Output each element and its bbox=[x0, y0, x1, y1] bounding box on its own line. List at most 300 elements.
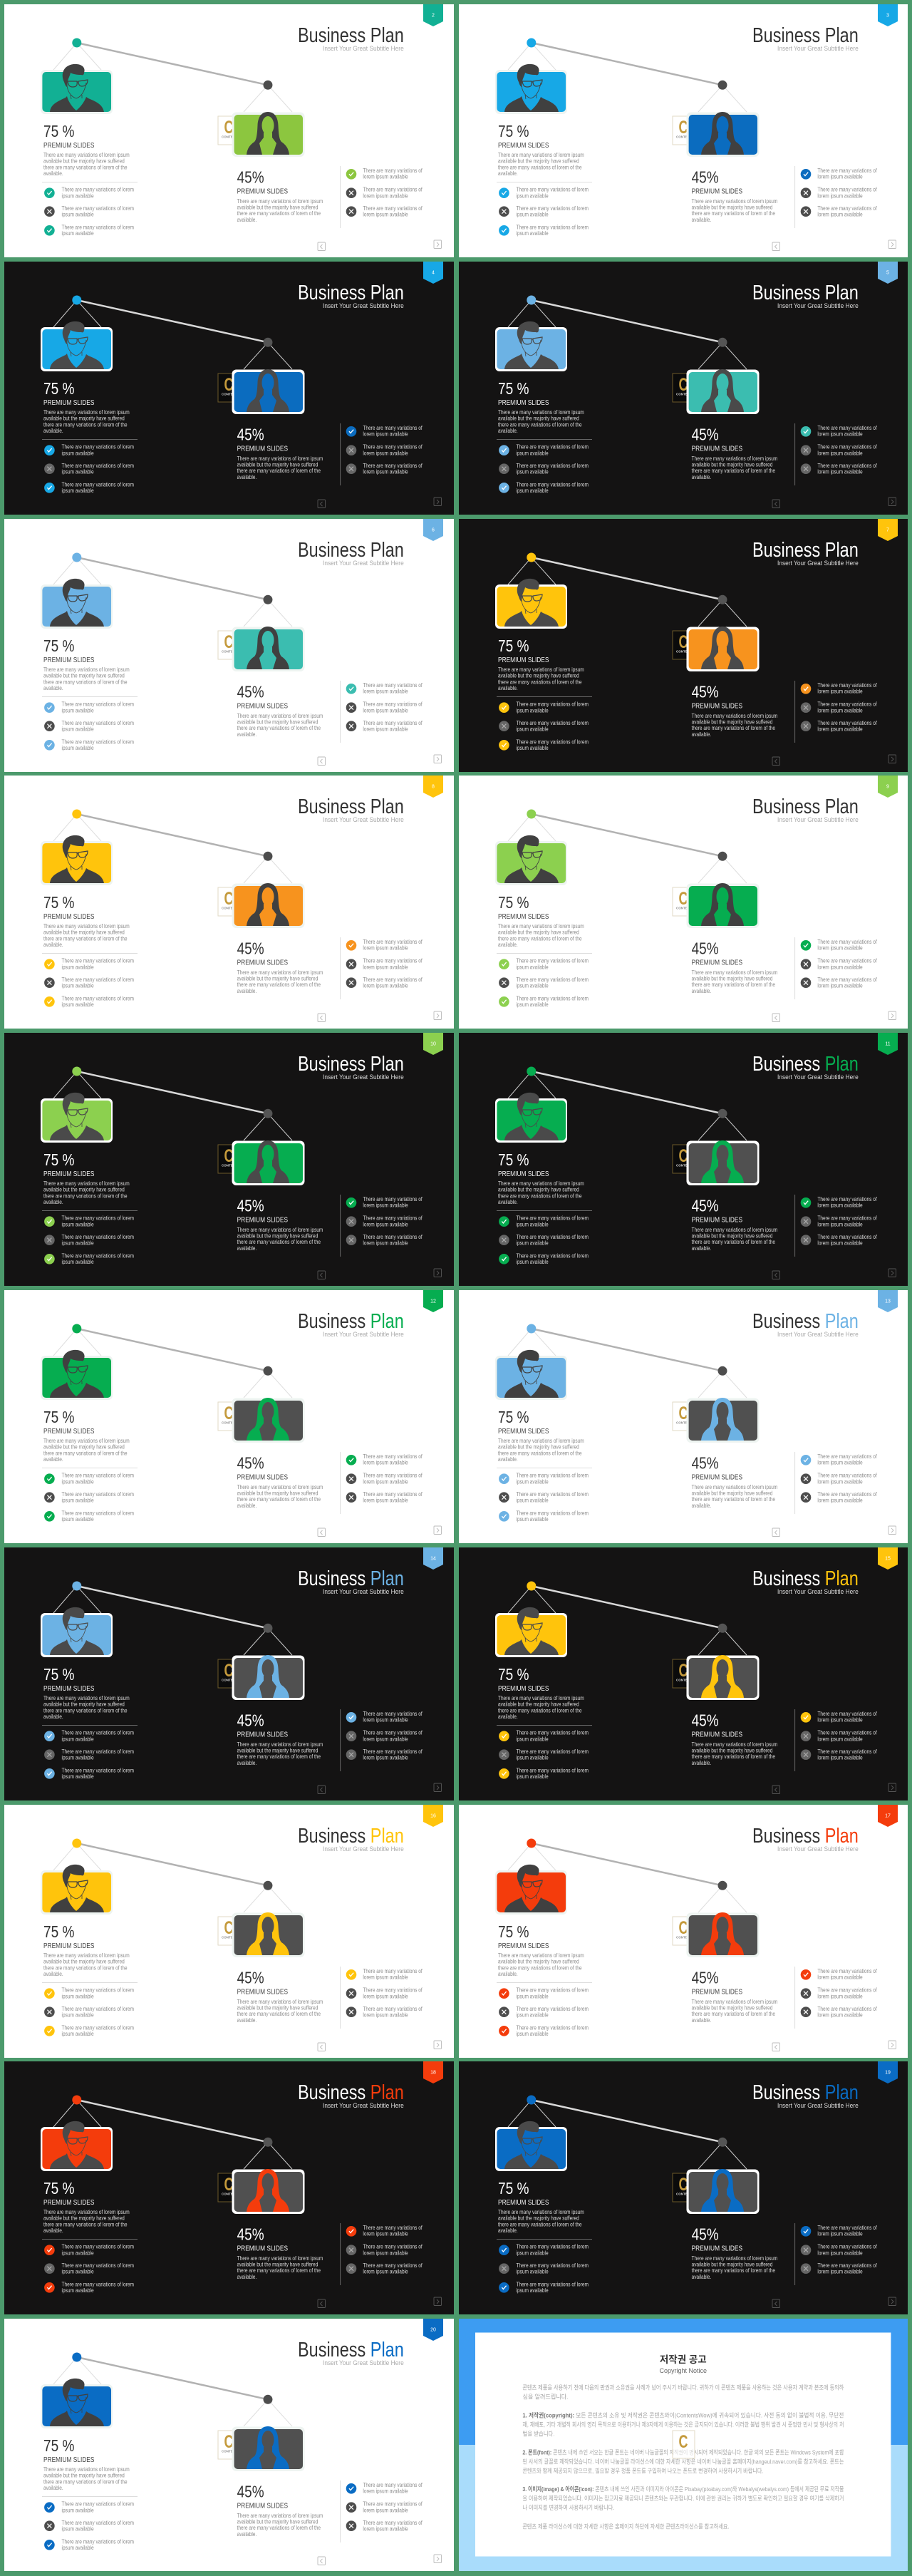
right checklist: lorem ipsum available bbox=[363, 688, 408, 694]
nav buttons bbox=[318, 755, 442, 765]
stat: 75 percent: there are many variations of lorem of the bbox=[498, 1192, 581, 1200]
left checklist: There are many variations of lorem bbox=[516, 1252, 589, 1259]
stat: 75 percent: 75 % bbox=[498, 637, 529, 655]
stat: 45 percent: PREMIUM SLIDES bbox=[691, 1473, 742, 1481]
right checklist bbox=[341, 1709, 423, 1771]
stat: 75 percent: there are many variations of lorem of the bbox=[43, 421, 127, 428]
left checklist: ipsum available bbox=[516, 1773, 548, 1780]
right checklist bbox=[794, 1709, 877, 1771]
right checklist bbox=[341, 423, 423, 485]
stat: 45 percent bbox=[237, 684, 323, 738]
right checklist: There are many variations of bbox=[817, 1196, 877, 1202]
card: woman portrait bbox=[686, 1655, 759, 1700]
stat: 45 percent: There are many variations of lorem ipsum bbox=[237, 2255, 323, 2262]
left checklist: ipsum available bbox=[516, 468, 548, 475]
stat: 45 percent: available. bbox=[691, 2274, 711, 2281]
stat: 45 percent: available but the majority have suffered bbox=[237, 1232, 318, 1240]
stat: 75 percent: 75 % bbox=[43, 2180, 75, 2198]
nav buttons bbox=[772, 240, 896, 251]
stat: 45 percent: 45% bbox=[691, 426, 718, 444]
stat: 75 percent: available but the majority have suffered bbox=[498, 1443, 579, 1451]
logo stamp: CONTENTS bbox=[676, 392, 693, 396]
stat: 75 percent bbox=[498, 1408, 584, 1463]
stat: 45 percent bbox=[237, 1197, 323, 1252]
right checklist: There are many variations of bbox=[363, 1234, 423, 1240]
ribbon: page number 4 bbox=[423, 262, 443, 284]
left checklist: ipsum available bbox=[516, 726, 548, 732]
logo stamp bbox=[673, 2431, 695, 2458]
stat: 45 percent: There are many variations of lorem ipsum bbox=[691, 1998, 777, 2005]
right checklist: There are many variations of bbox=[363, 2262, 423, 2270]
stat: 45 percent: available. bbox=[691, 1759, 711, 1766]
logo stamp: C bbox=[224, 888, 234, 909]
right checklist: There are many variations of bbox=[363, 977, 423, 984]
logo stamp: C bbox=[224, 632, 234, 651]
stat: 45 percent: 45% bbox=[237, 2226, 264, 2245]
stat: 75 percent: There are many variations of lorem ipsum bbox=[43, 2209, 130, 2216]
stat: 45 percent: PREMIUM SLIDES bbox=[237, 1473, 288, 1481]
left checklist: ipsum available bbox=[61, 1240, 94, 1247]
left checklist: There are many variations of lorem bbox=[61, 701, 134, 707]
stat: 75 percent: PREMIUM SLIDES bbox=[498, 1942, 549, 1949]
logo stamp: C bbox=[224, 2431, 234, 2452]
stat: 45 percent: There are many variations of lorem ipsum bbox=[237, 1483, 323, 1490]
stat: 75 percent: there are many variations of lorem of the bbox=[43, 164, 127, 170]
card: woman portrait bbox=[232, 1912, 305, 1957]
logo stamp: C bbox=[224, 1403, 234, 1423]
connector: dots and hanging lines bbox=[53, 552, 292, 627]
left checklist: ipsum available bbox=[61, 2268, 94, 2275]
connector: dots and hanging lines bbox=[53, 810, 292, 883]
stat: 75 percent: 75 % bbox=[498, 380, 529, 398]
stat: 45 percent: available but the majority have suffered bbox=[237, 975, 318, 982]
logo stamp: C bbox=[224, 374, 234, 395]
logo stamp: CONTENTS bbox=[222, 135, 239, 138]
left checklist bbox=[42, 2497, 138, 2551]
logo stamp bbox=[673, 1145, 695, 1173]
left checklist bbox=[42, 182, 138, 237]
stat: 45 percent: 45% bbox=[691, 940, 718, 959]
ribbon: page number 20 bbox=[423, 2319, 443, 2341]
stat: 45 percent: there are many variations of lorem of the bbox=[237, 467, 321, 474]
stat: 45 percent: there are many variations of lorem of the bbox=[691, 2267, 775, 2274]
right checklist: lorem ipsum available bbox=[363, 468, 408, 475]
stat: 75 percent: available. bbox=[43, 942, 63, 949]
stat: 45 percent: 45% bbox=[691, 169, 718, 187]
title: Business Plan bbox=[752, 2081, 858, 2104]
left checklist: There are many variations of lorem bbox=[516, 957, 589, 964]
left checklist: There are many variations of lorem bbox=[61, 1472, 134, 1479]
nav buttons bbox=[772, 2297, 896, 2308]
stat: 75 percent: 75 % bbox=[43, 637, 75, 655]
title: Business Plan bbox=[298, 1823, 404, 1847]
stat: 45 percent: PREMIUM SLIDES bbox=[237, 959, 288, 967]
stat: 75 percent: There are many variations of lorem ipsum bbox=[498, 923, 584, 930]
left checklist: ipsum available bbox=[516, 1001, 548, 1009]
nav buttons bbox=[318, 498, 442, 508]
right checklist: lorem ipsum available bbox=[363, 192, 408, 199]
stat: 75 percent: available. bbox=[43, 684, 63, 691]
logo stamp: CONTENTS bbox=[676, 1421, 693, 1424]
card: man portrait bbox=[495, 1607, 567, 1657]
right checklist: There are many variations of bbox=[363, 443, 423, 450]
stat: 75 percent: available. bbox=[43, 170, 63, 177]
stat: 45 percent: PREMIUM SLIDES bbox=[691, 959, 742, 967]
left checklist: ipsum available bbox=[516, 211, 548, 218]
stat: 75 percent: available but the majority have suffered bbox=[498, 1186, 579, 1193]
stat: 75 percent: PREMIUM SLIDES bbox=[43, 2456, 94, 2463]
ribbon: page number 3 bbox=[878, 4, 898, 26]
connector: dots and hanging lines bbox=[508, 1838, 747, 1912]
stat: 75 percent: 75 % bbox=[43, 380, 75, 398]
nav buttons bbox=[318, 2041, 442, 2051]
stat: 75 percent: available but the majority have suffered bbox=[43, 2472, 125, 2479]
nav buttons bbox=[772, 498, 896, 508]
logo stamp: CONTENTS bbox=[676, 1678, 693, 1681]
stat: 75 percent: 75 % bbox=[498, 1408, 529, 1426]
ribbon: page number 16: 16 bbox=[430, 1813, 436, 1818]
stat: 45 percent bbox=[237, 1969, 323, 2024]
ribbon: page number 11 bbox=[878, 1033, 898, 1055]
slide 10: light green and green on black bbox=[4, 1033, 454, 1286]
stat: 45 percent: there are many variations of lorem of the bbox=[237, 2267, 321, 2274]
card: man portrait bbox=[41, 2379, 113, 2428]
stat: 75 percent: There are many variations of lorem ipsum bbox=[43, 2466, 130, 2473]
stat: 75 percent: there are many variations of lorem of the bbox=[43, 1964, 127, 1971]
stat: 45 percent: PREMIUM SLIDES bbox=[691, 702, 742, 709]
left checklist: There are many variations of lorem bbox=[516, 186, 589, 193]
logo stamp bbox=[673, 1917, 695, 1945]
stat: 45 percent: There are many variations of lorem ipsum bbox=[691, 1741, 777, 1748]
left checklist: There are many variations of lorem bbox=[516, 1215, 589, 1222]
stat: 45 percent: PREMIUM SLIDES bbox=[237, 1988, 288, 1995]
left checklist: ipsum available bbox=[61, 449, 94, 456]
stat: 45 percent: available but the majority have suffered bbox=[237, 2261, 318, 2268]
stat: 45 percent: There are many variations of lorem ipsum bbox=[237, 197, 323, 205]
stat: 45 percent: 45% bbox=[691, 1455, 718, 1473]
title: Business Plan bbox=[752, 1052, 858, 1076]
title: Business Plan bbox=[752, 1823, 858, 1847]
subtitle: Insert Your Great Subtitle Here bbox=[777, 2102, 858, 2110]
stat: 45 percent: available but the majority have suffered bbox=[237, 718, 318, 725]
stat: 75 percent: available but the majority have suffered bbox=[498, 929, 579, 936]
right checklist: lorem ipsum available bbox=[817, 468, 862, 475]
stat: 45 percent: PREMIUM SLIDES bbox=[691, 445, 742, 453]
subtitle: Insert Your Great Subtitle Here bbox=[777, 45, 858, 52]
logo stamp: C bbox=[678, 632, 688, 651]
stat: 45 percent: There are many variations of lorem ipsum bbox=[691, 1483, 777, 1490]
left checklist: ipsum available bbox=[61, 1497, 94, 1504]
stat: 45 percent: there are many variations of lorem of the bbox=[691, 210, 775, 217]
right checklist: lorem ipsum available bbox=[363, 173, 408, 180]
stat: 75 percent: PREMIUM SLIDES bbox=[498, 656, 549, 664]
stat: 45 percent: available. bbox=[237, 1502, 256, 1509]
right checklist: There are many variations of bbox=[817, 1967, 877, 1974]
stat: 75 percent: available. bbox=[498, 1970, 517, 1977]
left checklist: ipsum available bbox=[61, 1515, 94, 1523]
right checklist: lorem ipsum available bbox=[817, 449, 862, 456]
logo stamp bbox=[218, 1917, 241, 1945]
ribbon: page number 17: 17 bbox=[885, 1813, 891, 1818]
stat: 75 percent: available but the majority have suffered bbox=[43, 672, 125, 679]
left checklist: ipsum available bbox=[61, 2287, 94, 2294]
stat: 75 percent: There are many variations of lorem ipsum bbox=[43, 408, 130, 416]
stat: 75 percent bbox=[43, 895, 130, 949]
left checklist: ipsum available bbox=[516, 1735, 548, 1742]
stat: 45 percent: there are many variations of lorem of the bbox=[237, 2525, 321, 2531]
slide 15: yellow with inverted card on black bbox=[459, 1547, 908, 1800]
left checklist: ipsum available bbox=[516, 192, 548, 199]
left checklist bbox=[42, 2240, 138, 2294]
ribbon: page number 15 bbox=[878, 1547, 898, 1570]
stat: 45 percent: 45% bbox=[237, 1455, 264, 1473]
logo stamp bbox=[218, 373, 241, 402]
ribbon: page number 2 bbox=[423, 4, 443, 26]
notice body text: 을 이용하여 제작되었습니다. 이미지는 참고자료 제공되니 콘텐츠와는 무관합니다. 이에 관한 권리는 귀하가 별도로 확인하고 필요할 경우 여기를 삭제하거 bbox=[522, 2495, 844, 2502]
logo stamp bbox=[673, 373, 695, 402]
slide 14: light blue with inverted card on black bbox=[4, 1547, 454, 1800]
stat: 45 percent: PREMIUM SLIDES bbox=[237, 445, 288, 453]
left checklist: ipsum available bbox=[516, 1992, 548, 1999]
right checklist: lorem ipsum available bbox=[817, 2268, 862, 2275]
ribbon: page number 9: 9 bbox=[886, 785, 889, 790]
connector: dots and hanging lines bbox=[53, 1581, 292, 1655]
slide 19: blue with inverted card on black bbox=[459, 2061, 908, 2314]
ribbon: page number 7 bbox=[878, 519, 898, 541]
left checklist: ipsum available bbox=[61, 964, 94, 971]
card: man portrait bbox=[41, 2121, 113, 2171]
stat: 75 percent: 75 % bbox=[43, 2438, 75, 2456]
stat: 75 percent bbox=[43, 380, 130, 434]
stat: 75 percent: available. bbox=[498, 1713, 517, 1720]
stat: 75 percent: available but the majority have suffered bbox=[43, 929, 125, 936]
stat: 75 percent bbox=[43, 2180, 130, 2235]
left checklist: ipsum available bbox=[516, 2011, 548, 2018]
stat: 45 percent: PREMIUM SLIDES bbox=[237, 2502, 288, 2510]
right checklist: lorem ipsum available bbox=[363, 1992, 408, 1999]
stat: 75 percent: there are many variations of lorem of the bbox=[43, 935, 127, 942]
left checklist: There are many variations of lorem bbox=[61, 2520, 134, 2526]
stat: 45 percent bbox=[691, 940, 777, 995]
left checklist: ipsum available bbox=[516, 1240, 548, 1247]
logo stamp: CONTENTS bbox=[676, 2193, 693, 2196]
right checklist: There are many variations of bbox=[363, 701, 423, 707]
right checklist: There are many variations of bbox=[817, 957, 877, 964]
title: Business Plan bbox=[752, 1309, 858, 1333]
logo stamp bbox=[673, 631, 695, 659]
stat: 75 percent bbox=[498, 380, 584, 434]
stat: 75 percent: PREMIUM SLIDES bbox=[43, 1427, 94, 1435]
right checklist: There are many variations of bbox=[363, 1710, 423, 1717]
connector: dots and hanging lines bbox=[53, 38, 292, 112]
ribbon: page number 10 bbox=[423, 1033, 443, 1055]
card: woman portrait bbox=[232, 1140, 305, 1185]
stat: 75 percent: There are many variations of lorem ipsum bbox=[43, 1952, 130, 1959]
stat: 75 percent: 75 % bbox=[498, 1152, 529, 1170]
right checklist: There are many variations of bbox=[817, 701, 877, 707]
right checklist bbox=[794, 937, 877, 999]
right checklist: lorem ipsum available bbox=[363, 1478, 408, 1485]
left checklist: ipsum available bbox=[516, 1497, 548, 1504]
left checklist: There are many variations of lorem bbox=[61, 1987, 134, 1993]
right checklist bbox=[341, 937, 423, 999]
nav buttons bbox=[772, 1269, 896, 1279]
right checklist bbox=[794, 1967, 877, 2029]
right checklist: There are many variations of bbox=[363, 719, 423, 726]
right checklist: lorem ipsum available bbox=[817, 1202, 862, 1209]
card: woman portrait bbox=[686, 1398, 759, 1443]
stat: 45 percent: available. bbox=[691, 2016, 711, 2024]
left checklist: ipsum available bbox=[61, 1773, 94, 1780]
right checklist: lorem ipsum available bbox=[817, 1478, 862, 1485]
stat: 45 percent: There are many variations of lorem ipsum bbox=[237, 1741, 323, 1748]
ribbon: page number 15: 15 bbox=[885, 1556, 891, 1561]
subtitle: Insert Your Great Subtitle Here bbox=[777, 816, 858, 824]
connector: dots and hanging lines bbox=[508, 552, 747, 627]
stat: 75 percent: There are many variations of lorem ipsum bbox=[43, 923, 130, 930]
right checklist: There are many variations of bbox=[363, 1453, 423, 1460]
left checklist: ipsum available bbox=[516, 2287, 548, 2294]
right checklist: There are many variations of bbox=[363, 957, 423, 964]
ribbon: page number 12 bbox=[423, 1290, 443, 1312]
title: Business Plan bbox=[752, 537, 858, 561]
stat: 45 percent bbox=[691, 169, 777, 223]
ribbon: page number 7: 7 bbox=[886, 527, 889, 532]
left checklist: There are many variations of lorem bbox=[61, 1215, 134, 1222]
left checklist: ipsum available bbox=[61, 706, 94, 713]
stat: 75 percent: available. bbox=[498, 1456, 517, 1463]
stat: 75 percent bbox=[43, 1923, 130, 1977]
ribbon: page number 2: 2 bbox=[432, 13, 435, 19]
right checklist: There are many variations of bbox=[817, 2243, 877, 2250]
right checklist: There are many variations of bbox=[817, 1453, 877, 1460]
left checklist: ipsum available bbox=[61, 744, 94, 751]
stat: 45 percent bbox=[691, 2226, 777, 2281]
stat: 75 percent: 75 % bbox=[43, 123, 75, 140]
stat: 45 percent: There are many variations of lorem ipsum bbox=[691, 969, 777, 977]
left checklist: There are many variations of lorem bbox=[61, 1490, 134, 1498]
right checklist bbox=[794, 2223, 877, 2285]
left checklist: There are many variations of lorem bbox=[516, 2243, 589, 2250]
logo stamp: C bbox=[224, 117, 234, 138]
stat: 45 percent: there are many variations of lorem of the bbox=[237, 1239, 321, 1245]
stat: 45 percent: 45% bbox=[691, 1197, 718, 1215]
ribbon: page number 17 bbox=[878, 1805, 898, 1827]
slide 20: blue with inverted card on white bbox=[4, 2319, 454, 2571]
stat: 45 percent: available. bbox=[237, 988, 256, 995]
title: Business Plan bbox=[298, 280, 404, 304]
stat: 75 percent: PREMIUM SLIDES bbox=[43, 141, 94, 149]
stat: 75 percent: there are many variations of lorem of the bbox=[498, 678, 581, 685]
stat: 45 percent: There are many variations of lorem ipsum bbox=[237, 1227, 323, 1233]
right checklist: There are many variations of bbox=[363, 2520, 423, 2526]
right checklist: lorem ipsum available bbox=[817, 211, 862, 218]
title: Business Plan bbox=[298, 537, 404, 561]
right checklist: lorem ipsum available bbox=[817, 1735, 862, 1742]
stat: 75 percent: available but the majority have suffered bbox=[43, 2215, 125, 2222]
logo stamp: CONTENTS bbox=[676, 135, 693, 138]
stat: 45 percent bbox=[691, 426, 777, 480]
ribbon: page number 20: 20 bbox=[430, 2328, 436, 2333]
title: Business Plan bbox=[298, 1052, 404, 1076]
stat: 45 percent bbox=[237, 1712, 323, 1766]
stat: 45 percent: 45% bbox=[691, 1712, 718, 1730]
stat: 75 percent: there are many variations of lorem of the bbox=[43, 1192, 127, 1200]
connector: dots and hanging lines bbox=[53, 1067, 292, 1140]
logo stamp: C bbox=[678, 1660, 688, 1681]
card: man portrait bbox=[41, 64, 113, 114]
stat: 75 percent bbox=[43, 637, 130, 691]
subtitle: Insert Your Great Subtitle Here bbox=[777, 302, 858, 309]
stat: 45 percent bbox=[237, 426, 323, 480]
left checklist: There are many variations of lorem bbox=[516, 1987, 589, 1993]
logo stamp: C bbox=[678, 374, 688, 395]
right checklist: There are many variations of bbox=[817, 1472, 877, 1479]
notice body text: 심을 알려드립니다. bbox=[522, 2394, 568, 2401]
right checklist: lorem ipsum available bbox=[817, 726, 862, 732]
left checklist: ipsum available bbox=[516, 706, 548, 713]
stat: 75 percent: available. bbox=[498, 1199, 517, 1205]
subtitle: Insert Your Great Subtitle Here bbox=[323, 2102, 404, 2110]
right checklist: lorem ipsum available bbox=[363, 2011, 408, 2018]
left checklist: ipsum available bbox=[61, 1754, 94, 1761]
stat: 45 percent: available. bbox=[237, 473, 256, 480]
card: man portrait bbox=[495, 321, 567, 371]
stat: 45 percent: There are many variations of lorem ipsum bbox=[691, 1227, 777, 1233]
right checklist: There are many variations of bbox=[817, 186, 877, 193]
stat: 75 percent bbox=[498, 637, 584, 691]
right checklist: lorem ipsum available bbox=[817, 982, 862, 989]
ribbon: page number 9 bbox=[878, 776, 898, 798]
stat: 75 percent bbox=[498, 123, 584, 177]
ribbon: page number 19: 19 bbox=[885, 2071, 891, 2076]
logo stamp: CONTENTS bbox=[676, 907, 693, 910]
right checklist: lorem ipsum available bbox=[817, 688, 862, 694]
stat: 75 percent: there are many variations of lorem of the bbox=[43, 1450, 127, 1456]
right checklist: lorem ipsum available bbox=[363, 1754, 408, 1761]
card: woman portrait bbox=[232, 2426, 305, 2471]
stat: 75 percent: There are many variations of lorem ipsum bbox=[498, 2209, 584, 2216]
stat: 75 percent: there are many variations of lorem of the bbox=[498, 935, 581, 942]
right checklist bbox=[794, 166, 877, 228]
stat: 45 percent: There are many variations of lorem ipsum bbox=[691, 712, 777, 719]
stat: 45 percent: there are many variations of lorem of the bbox=[237, 210, 321, 217]
stat: 45 percent: available. bbox=[237, 2274, 256, 2281]
stat: 45 percent: PREMIUM SLIDES bbox=[237, 2245, 288, 2252]
right checklist: There are many variations of bbox=[817, 443, 877, 450]
logo stamp: C bbox=[678, 888, 688, 909]
right checklist: There are many variations of bbox=[363, 2005, 423, 2012]
subtitle: Insert Your Great Subtitle Here bbox=[777, 559, 858, 567]
left checklist: There are many variations of lorem bbox=[61, 2024, 134, 2031]
left checklist: ipsum available bbox=[516, 1221, 548, 1228]
stat: 75 percent bbox=[498, 1923, 584, 1977]
stat: 45 percent: There are many variations of lorem ipsum bbox=[237, 455, 323, 462]
right checklist: There are many variations of bbox=[817, 2262, 877, 2270]
right checklist: There are many variations of bbox=[363, 1196, 423, 1202]
card: woman portrait bbox=[232, 627, 305, 671]
card: woman portrait bbox=[686, 1912, 759, 1957]
right checklist: lorem ipsum available bbox=[817, 1221, 862, 1228]
stat: 75 percent: available. bbox=[43, 1199, 63, 1205]
stat: 75 percent: available. bbox=[498, 2227, 517, 2235]
stat: 75 percent: PREMIUM SLIDES bbox=[43, 656, 94, 664]
logo stamp: C bbox=[678, 1917, 688, 1937]
left checklist: ipsum available bbox=[61, 2011, 94, 2018]
slide 2: teal and green on white bbox=[4, 4, 454, 257]
stat: 75 percent: PREMIUM SLIDES bbox=[498, 913, 549, 921]
right checklist: There are many variations of bbox=[363, 1472, 423, 1479]
